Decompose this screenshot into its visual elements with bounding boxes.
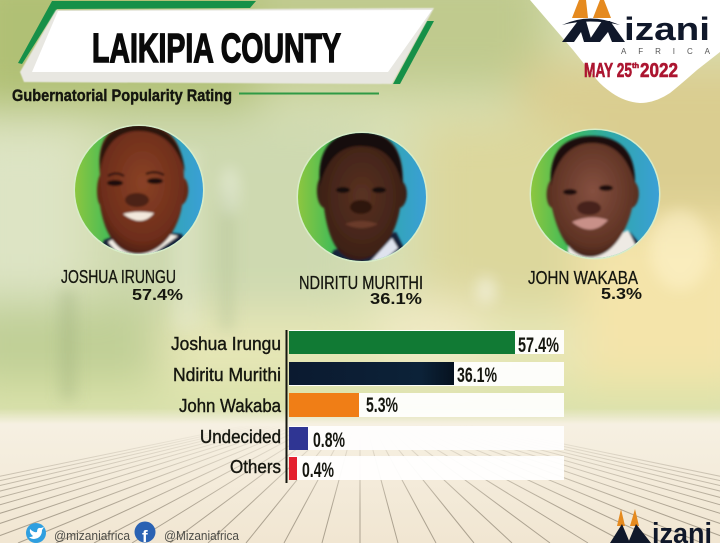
facebook handle: @Mizaniafrica [164, 529, 239, 543]
icon: twitter [26, 523, 46, 543]
row: Undecided: Undecided [200, 427, 281, 447]
row: Others: Others [230, 457, 281, 477]
candidate: John Wakaba [528, 128, 660, 303]
white corner panel [530, 0, 720, 103]
name: NDIRITU MURITHI [299, 273, 423, 293]
logo panel: Mizani Africa with date [530, 0, 720, 103]
date: 2022 [640, 60, 678, 82]
percent: 36.1% [370, 291, 422, 308]
logo wordmark: izani [624, 11, 710, 47]
background: wooden floor [0, 402, 720, 543]
subtitle with rule: Gubernatorial Popularity Rating [12, 87, 232, 105]
date: MAY 25 [584, 60, 632, 82]
name: JOHN WAKABA [528, 268, 638, 288]
percent: 57.4% [132, 287, 183, 304]
row: John Wakaba: John Wakaba [179, 396, 282, 416]
footer logo: Mizani [610, 509, 712, 543]
row: Others [230, 457, 334, 482]
logo tagline: AFRICA [621, 47, 711, 56]
row: Ndiritu Murithi: 36.1% [457, 364, 497, 387]
name: JOSHUA IRUNGU [61, 267, 176, 287]
row: Joshua Irungu: 57.4% [518, 334, 559, 357]
row: Ndiritu Murithi: Ndiritu Murithi [173, 365, 281, 385]
portrait [74, 124, 204, 256]
row: John Wakaba [179, 393, 398, 417]
portrait [530, 128, 660, 262]
row: Joshua Irungu [171, 331, 559, 357]
row: John Wakaba: 5.3% [366, 394, 398, 417]
row: Undecided [200, 427, 345, 452]
banner green top-left accent [18, 1, 256, 64]
heading: LAIKIPIA COUNTY [92, 25, 341, 71]
date: th [632, 63, 639, 70]
bar tracks [289, 330, 564, 480]
candidate: Joshua Irungu [61, 124, 204, 304]
title banner [18, 1, 434, 84]
row: Undecided: 0.8% [313, 429, 345, 452]
logo mark [562, 0, 625, 42]
footer: social handles [26, 522, 239, 543]
banner green right accent [393, 21, 434, 84]
row: Ndiritu Murithi [173, 362, 497, 387]
bar chart [171, 330, 564, 483]
banner panel [20, 8, 434, 84]
axis [286, 330, 288, 483]
candidate: Ndiritu Murithi [296, 132, 428, 308]
row: Joshua Irungu: Joshua Irungu [171, 334, 281, 354]
icon: facebook [134, 522, 156, 543]
twitter handle: @mizaniafrica [54, 529, 130, 543]
percent: 5.3% [601, 286, 642, 303]
row: Others: 0.4% [302, 459, 334, 482]
portrait [296, 132, 428, 265]
